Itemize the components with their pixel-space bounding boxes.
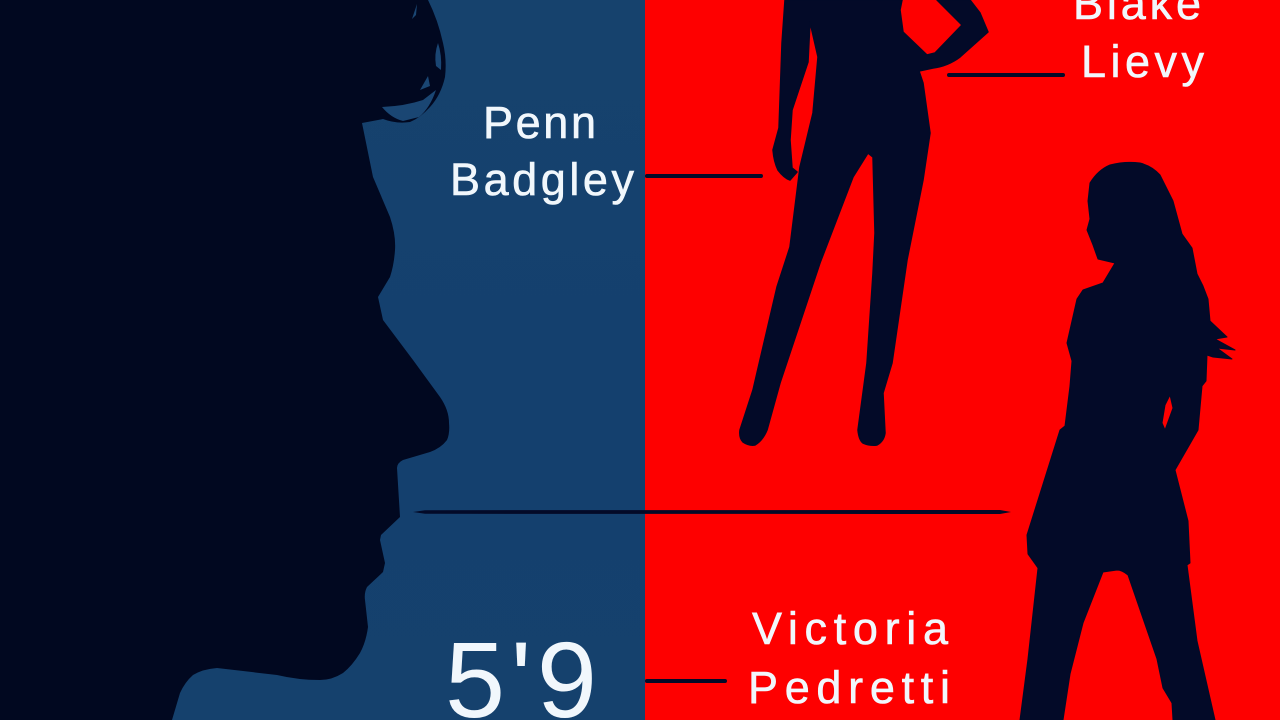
silhouette: woman with long hair — [1020, 162, 1235, 720]
label: Penn Badgley — [450, 97, 634, 205]
line: shared height marker — [413, 510, 1011, 514]
label: Penn Badgley: Badgley — [450, 154, 634, 205]
silhouette: man's head in profile — [0, 0, 449, 720]
label: Victoria Pedretti: Victoria — [752, 603, 949, 654]
label: Blake Lievy: Lievy — [1081, 36, 1204, 87]
label: Victoria Pedretti — [748, 603, 950, 713]
hair highlight patches — [382, 4, 441, 121]
line: Penn Badgley leader — [645, 174, 763, 178]
silhouette: standing woman with hand on hip — [740, 0, 988, 445]
line: Victoria Pedretti leader — [645, 679, 727, 683]
line: Blake Lively leader — [947, 73, 1065, 77]
label: Blake Lievy — [1073, 0, 1204, 87]
label: Victoria Pedretti: Pedretti — [748, 662, 950, 713]
panel: blue background — [0, 0, 645, 720]
label: Penn Badgley: Penn — [483, 97, 596, 148]
panel: red background — [645, 0, 1280, 720]
